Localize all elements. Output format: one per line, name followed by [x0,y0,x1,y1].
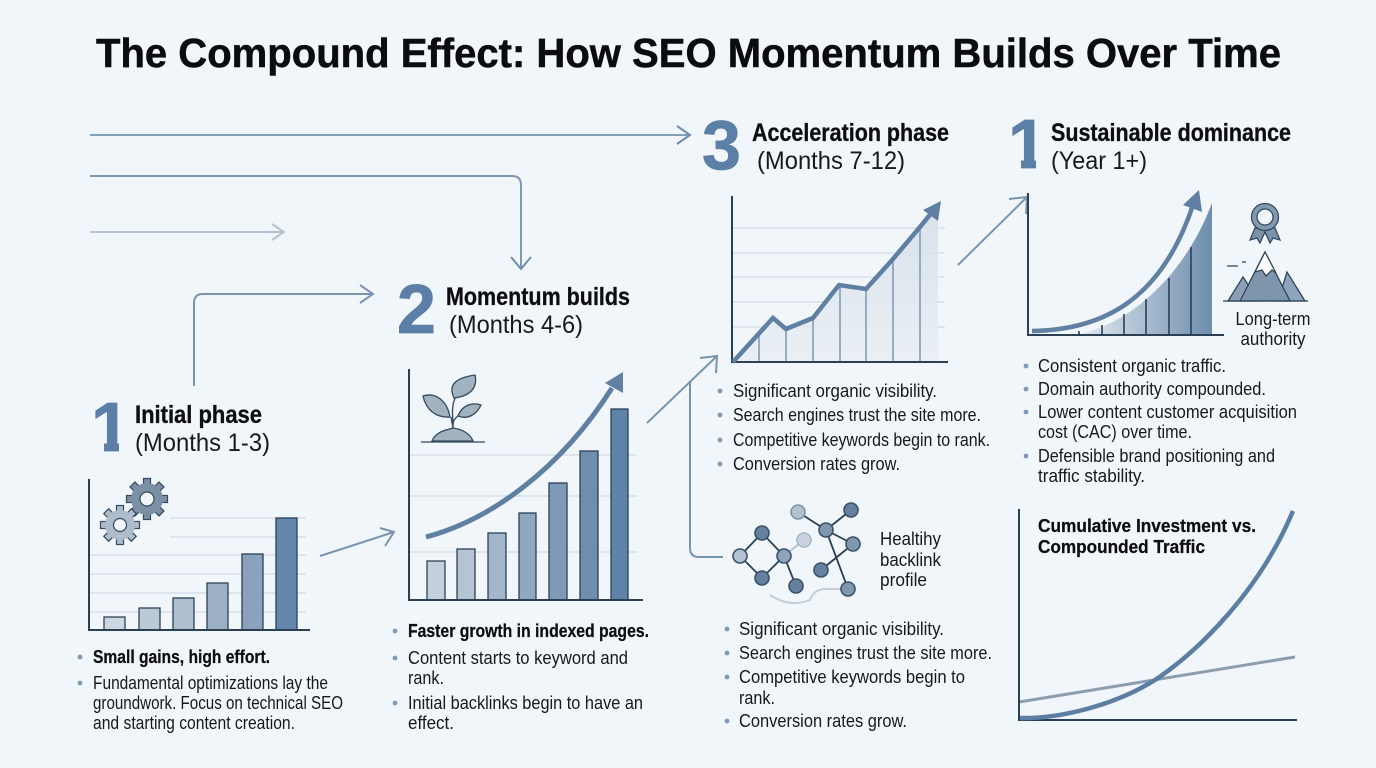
list: phase 4 bullets: traffic stability. [1038,466,1145,486]
list: phase 3 bullets: Competitive keywords begin to rank. [733,430,990,450]
arrow: chart 2 to chart 3 [647,356,717,423]
list: phase 1 bullets [78,647,343,733]
chart: cumulative investment vs compounded traffic [1019,509,1297,720]
backlink label: Healtihy [880,529,941,549]
list: phase 2 bullets: Initial backlinks begin to have an [408,693,643,713]
phase 3 heading [752,119,949,175]
list: phase 3 bullets: Significant organic visibility. [733,381,937,401]
phase 1 number: 1 [91,388,130,466]
bar chart: phase 2 [409,369,643,600]
list: phase 2 bullets: Content starts to keyword and [408,648,628,668]
long-term authority label: Long-term [1236,309,1310,329]
arrow: short faint arrow [90,224,284,240]
chart title: Cumulative Investment vs. [1038,516,1256,536]
arrow: chart 1 to chart 2 [320,528,394,556]
list: backlink bullets: Search engines trust the site more. [739,643,992,663]
line chart: phase 3 [732,196,948,362]
list: phase 3 bullets: Conversion rates grow. [733,454,900,474]
icon: award ribbon [1250,204,1280,243]
backlink label: backlink [880,550,942,570]
list: phase 4 bullets [1024,356,1297,486]
list: phase 1 bullets: Fundamental optimizations lay the [93,673,328,693]
list: phase 3 bullets: Search engines trust the site more. [733,405,981,425]
list: backlink bullets: Significant organic visibility. [739,619,944,639]
phase 3 number: 3 [702,106,741,184]
list: phase 4 bullets: Domain authority compounded. [1038,379,1266,399]
arrow: chart 3 to chart 4 [958,197,1027,265]
area chart: phase 4 [1028,190,1224,335]
growth arrow: phase 2 [426,372,623,537]
phase 2 heading: Momentum builds [446,283,630,311]
phase 3 heading: (Months 7-12) [757,147,905,175]
connector: chart 3 to backlink network [690,382,723,557]
list: phase 2 bullets: rank. [408,668,444,688]
phase 3 heading: Acceleration phase [752,119,949,147]
icon: sprout [421,375,485,442]
list: backlink bullets: rank. [739,688,775,708]
phase 4 heading: (Year 1+) [1051,147,1147,175]
phase 2 heading: (Months 4-6) [449,311,583,339]
backlink label: profile [880,570,927,590]
list: backlink bullets [725,619,992,731]
list: phase 4 bullets: cost (CAC) over time. [1038,422,1192,442]
arrow: top long arrow to phase 3 [90,126,690,144]
bar chart: phase 1 [89,479,310,630]
list: backlink bullets: Competitive keywords begin to [739,667,965,687]
panel: phase 2 [393,270,649,733]
long-term authority label: authority [1240,329,1306,349]
icon: mountains [1223,252,1308,301]
list: phase 3 bullets [718,381,990,474]
list: phase 4 bullets: Consistent organic traffic. [1038,356,1226,376]
phase 4 heading [1051,119,1291,175]
phase 4 number: 1 [1008,105,1047,183]
phase 4 heading: Sustainable dominance [1051,119,1291,147]
long-term authority label [1236,309,1310,349]
phase 1 heading: (Months 1-3) [135,429,270,457]
phase 1 heading: Initial phase [135,401,262,429]
list: phase 4 bullets: Lower content customer acquisition [1038,402,1297,422]
list: phase 2 bullets [393,621,649,733]
arrow: phase 1 up to phase 2 [194,285,373,386]
panel: phase 4 [1008,105,1310,486]
list: phase 1 bullets: Small gains, high effort. [93,647,270,667]
growth arrow: phase 4 [1032,190,1202,331]
panel: phase 3 [702,106,992,731]
icon: gears [100,478,168,544]
phase 2 number: 2 [397,270,436,348]
list: phase 4 bullets: Defensible brand positioning and [1038,446,1275,466]
phase 2 heading [446,283,630,339]
list: phase 2 bullets: effect. [408,713,454,733]
chart title: Compounded Traffic [1038,537,1205,557]
backlink label [880,529,942,590]
arrow: second elbow arrow to phase 2 [90,176,531,269]
list: phase 1 bullets: and starting content creation. [93,713,295,733]
list: backlink bullets: Conversion rates grow. [739,711,907,731]
icon: backlink network [733,503,860,603]
panel: phase 1 [78,388,343,733]
list: phase 1 bullets: groundwork. Focus on technical SEO [93,693,343,713]
title: The Compound Effect: How SEO Momentum Builds Over Time [96,30,1281,76]
list: phase 2 bullets: Faster growth in indexed pages. [408,621,649,641]
chart title [1038,516,1256,557]
phase 1 heading [135,401,270,457]
